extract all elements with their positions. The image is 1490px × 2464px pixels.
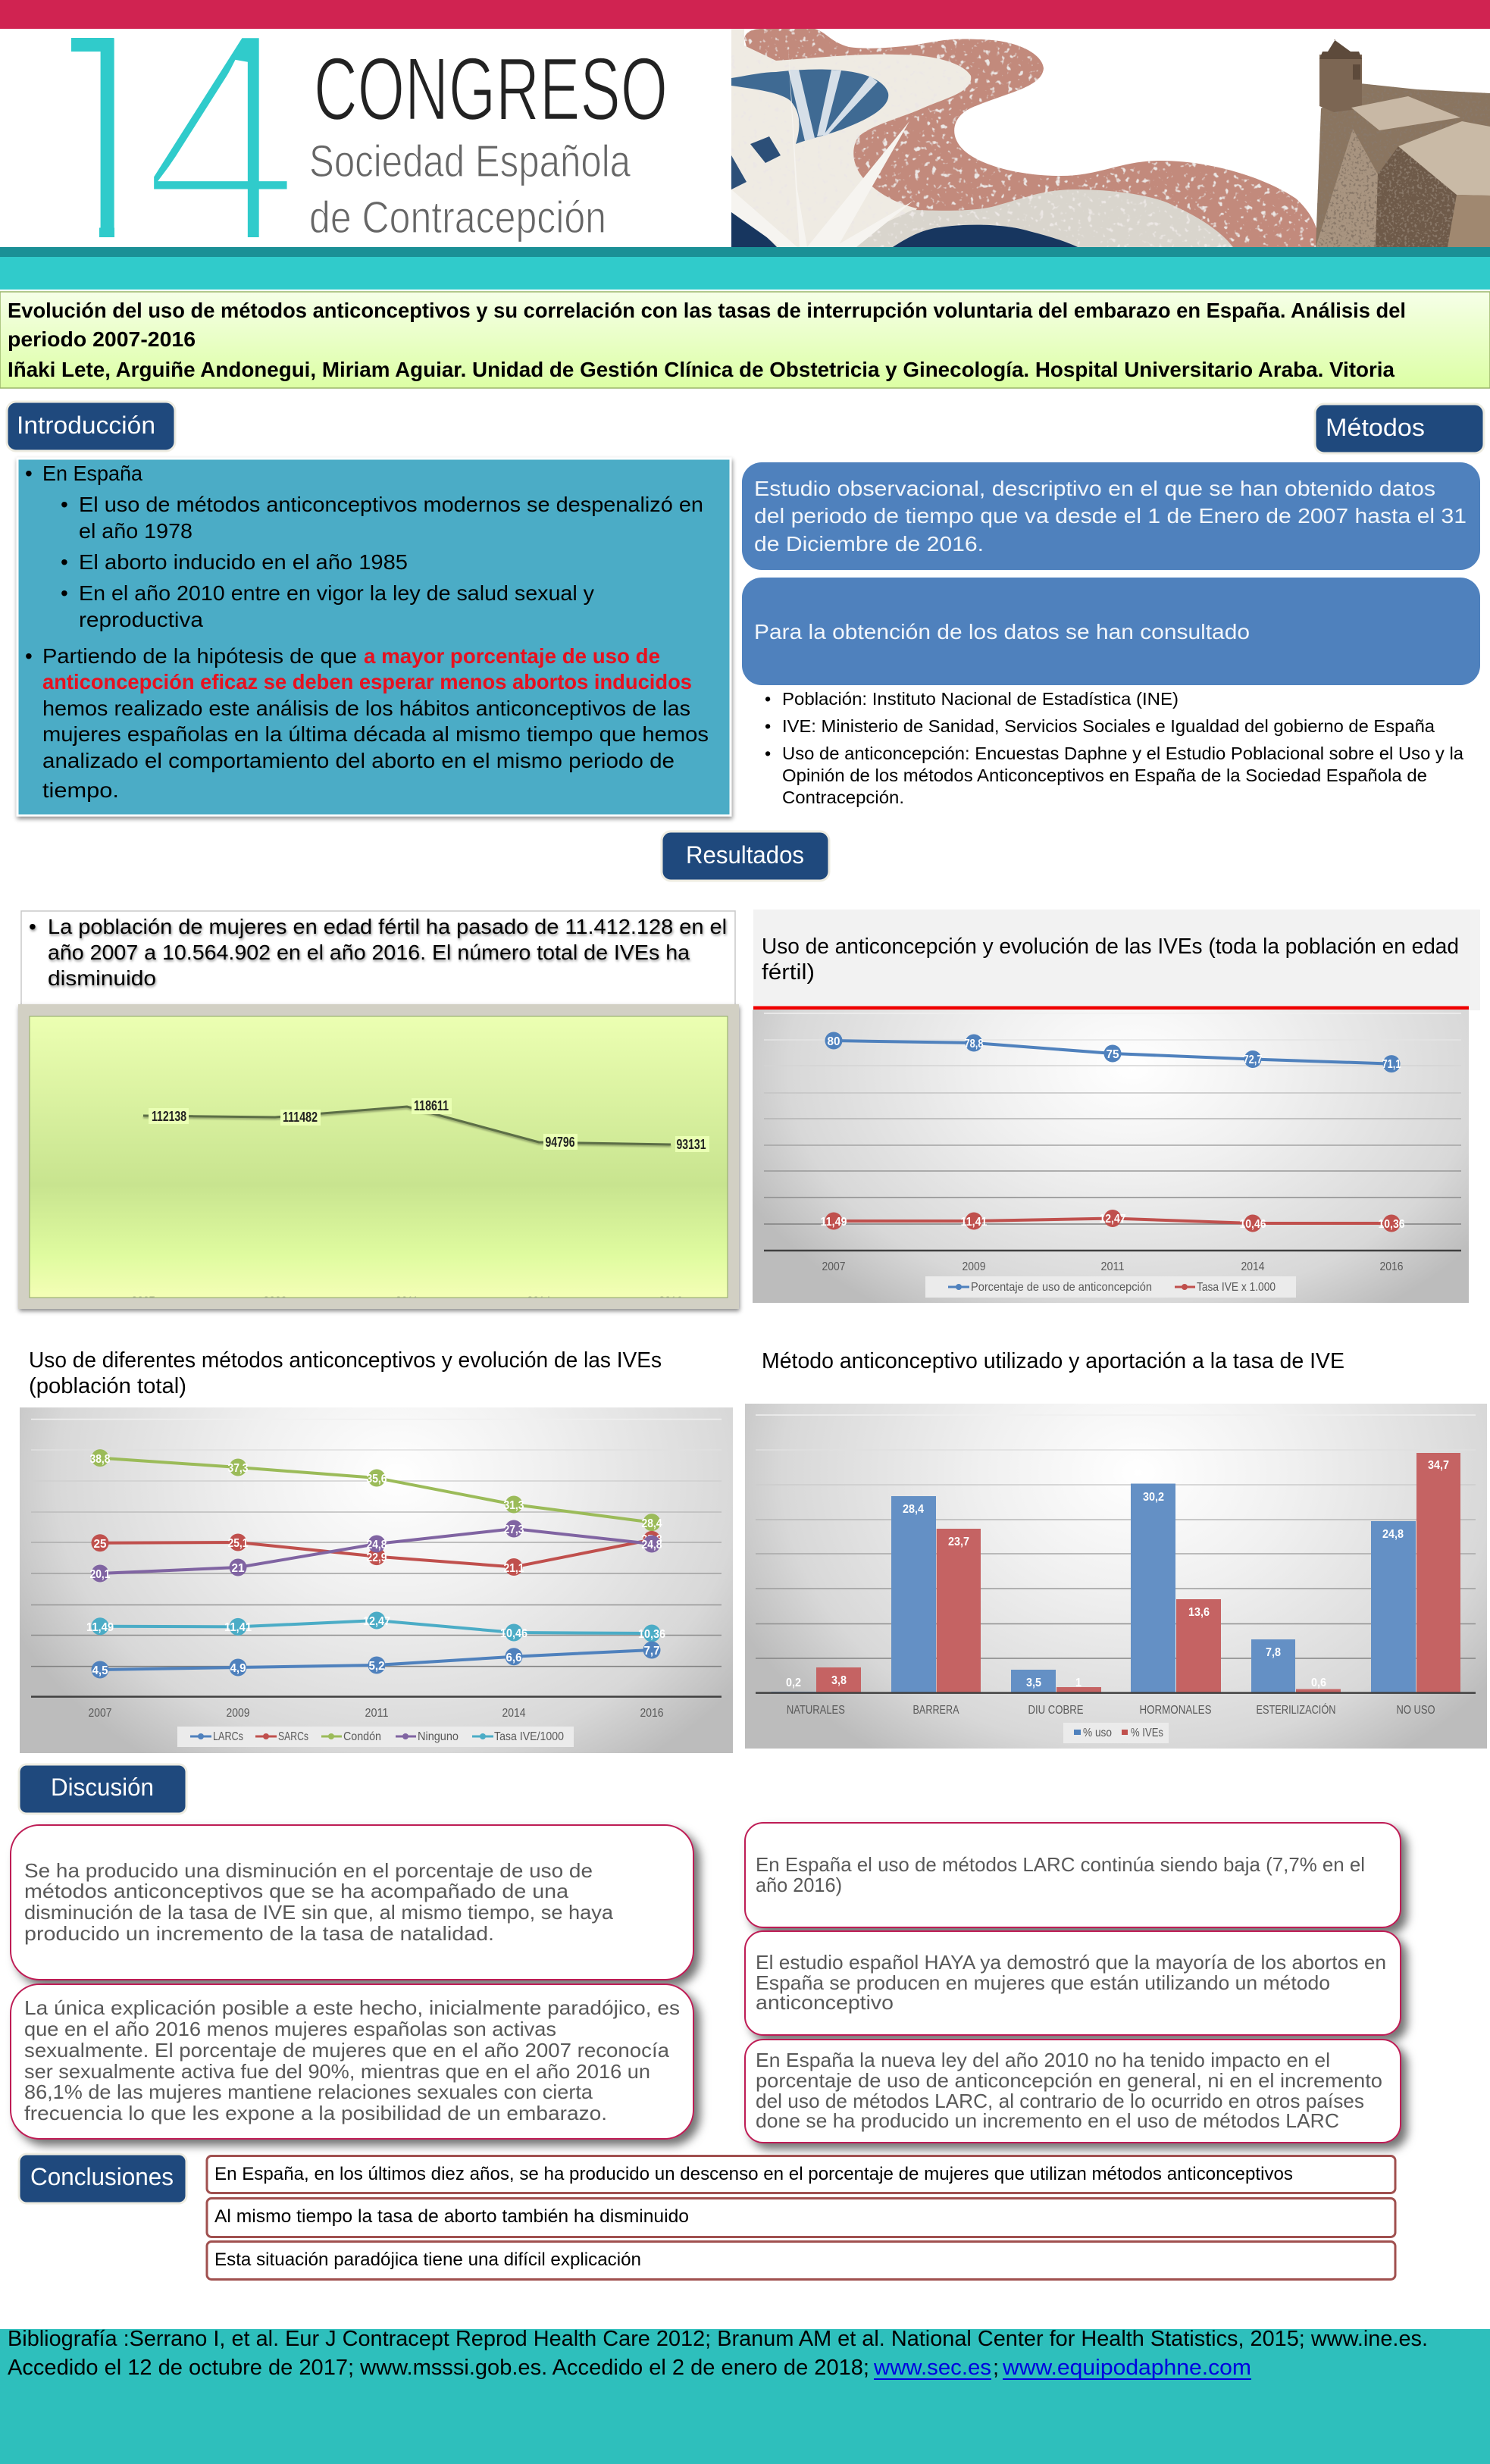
list: fuentes consultadas: Contracepción. xyxy=(782,787,904,807)
heading: Resultados xyxy=(662,831,829,881)
discussion box 3 xyxy=(745,1823,1401,1927)
chart: número total de IVEs: 111482 xyxy=(283,1110,318,1125)
series: SARCs: 25,8 xyxy=(641,1533,662,1546)
heading: Resultados: Resultados xyxy=(686,841,804,869)
series: porcentaje de uso: 75 xyxy=(1107,1048,1119,1061)
series: tasa IVE/1000: 10,46 xyxy=(500,1627,527,1640)
panel: población e IVEs: año 2007 a 10.564.902 en el año 2016. El número total de IVEs ha xyxy=(48,941,690,964)
axis years xyxy=(822,1260,1404,1273)
series: SARCs: 22,9 xyxy=(367,1551,387,1564)
category labels: BARRERA xyxy=(912,1704,959,1717)
chart heading: diferentes métodos: Uso de diferentes métodos anticonceptivos y evolución de las IVEs xyxy=(29,1348,662,1373)
category labels: NO USO xyxy=(1396,1704,1435,1717)
chart: número total de IVEs: 93131 xyxy=(676,1137,706,1152)
bar value labels xyxy=(786,1459,1449,1689)
panel: introducción: el año 1978 xyxy=(79,519,193,543)
list: fuentes consultadas xyxy=(765,689,1464,807)
series: porcentaje de uso: 78,8 xyxy=(964,1038,984,1050)
series: LARCs xyxy=(91,1642,661,1678)
heading: Introducción: Introducción xyxy=(17,412,155,439)
series: LARCs: 4,5 xyxy=(92,1664,108,1677)
chart heading: método utilizado: Método anticonceptivo utilizado y aportación a la tasa de IVE xyxy=(762,1349,1344,1373)
legend: LARCs xyxy=(213,1730,243,1743)
bar chart: método anticonceptivo y aportación xyxy=(745,1404,1487,1749)
panel: introducción: En el año 2010 entre en vigor la ley de salud sexual y xyxy=(79,581,594,605)
conclusion 1: En España, en los últimos diez años, se ha producido un descenso en el porcentaje de mujeres que utilizan métodos anticonceptivos xyxy=(214,2164,1293,2184)
panel: introducción: • xyxy=(61,550,68,574)
panel: estudio observacional: de Diciembre de 2016. xyxy=(754,532,984,556)
series: SARCs: 25,1 xyxy=(227,1537,249,1550)
series: ninguno: 24,8 xyxy=(641,1539,662,1551)
chart heading: diferentes métodos xyxy=(29,1348,662,1398)
chart: número total de IVEs: 2014 xyxy=(527,1294,551,1306)
discussion box 2: frecuencia lo que les expone a la posibilidad de un embarazo. xyxy=(24,2102,607,2124)
conclusion 3: Esta situación paradójica tiene una difícil explicación xyxy=(214,2250,641,2270)
discussion box 2: La única explicación posible a este hecho, inicialmente paradójico, es xyxy=(24,1996,680,2019)
list: fuentes consultadas: • xyxy=(765,689,771,709)
panel: introducción xyxy=(17,459,731,816)
footer: bibliografía: www.sec.es xyxy=(873,2356,991,2380)
title block xyxy=(0,292,1490,388)
conclusion 2 xyxy=(207,2198,1395,2237)
discussion box 4: El estudio español HAYA ya demostró que la mayoría de los abortos en xyxy=(756,1951,1386,1974)
logo: congress name xyxy=(309,39,668,243)
list: fuentes consultadas: Uso de anticoncepción: Encuestas Daphne y el Estudio Poblacional sobre el Uso y la xyxy=(782,744,1464,763)
list: fuentes consultadas: Opinión de los métodos Anticonceptivos en España de la Sociedad Española de xyxy=(782,765,1427,785)
panel: fuentes de datos: Para la obtención de los datos se han consultado xyxy=(754,620,1250,643)
legend: SARCs xyxy=(278,1730,308,1743)
list: fuentes consultadas: • xyxy=(765,744,771,763)
series: LARCs: 7,7 xyxy=(644,1645,660,1658)
legend xyxy=(177,1727,574,1747)
series: tasa IVE/1000: 10,36 xyxy=(638,1628,665,1641)
bar value labels: 1 xyxy=(1075,1677,1082,1689)
panel: introducción: analizado el comportamiento del aborto en el mismo periodo de xyxy=(42,749,675,772)
discussion box 2: que en el año 2016 menos mujeres españolas son activas xyxy=(24,2018,556,2040)
discussion box 1 xyxy=(11,1825,693,1980)
chart: número total de IVEs: 2007 xyxy=(131,1294,155,1306)
line chart: métodos anticonceptivos xyxy=(20,1407,733,1753)
bar value labels: 3,8 xyxy=(831,1674,847,1687)
bar value labels: 3,5 xyxy=(1026,1677,1041,1689)
series: LARCs: 6,6 xyxy=(506,1652,522,1664)
axis years: 2014 xyxy=(1241,1260,1265,1273)
discussion box 5: porcentaje de uso de anticoncepción en general, ni en el incremento xyxy=(756,2069,1382,2092)
panel: introducción: El aborto inducido en el año 1985 xyxy=(79,550,408,574)
series: SARCs: 21,1 xyxy=(503,1562,524,1575)
panel: introducción: tiempo. xyxy=(42,778,119,802)
discussion box 1: Se ha producido una disminución en el porcentaje de uso de xyxy=(24,1859,593,1882)
conclusion 1 xyxy=(207,2156,1395,2193)
chart: número total de IVEs: 2009 xyxy=(263,1294,287,1306)
chart: número total de IVEs: 2011 xyxy=(396,1294,418,1306)
category labels: DIU COBRE xyxy=(1028,1704,1084,1717)
legend xyxy=(1063,1723,1169,1743)
chart heading: uso de anticoncepción: Uso de anticoncepción y evolución de las IVEs (toda la población en edad xyxy=(762,935,1459,959)
logo: congress number 14 xyxy=(11,0,313,310)
footer: bibliografía: Bibliografía :Serrano I, et al. Eur J Contracept Reprod Health Care 2012; Branum AM et al. National Center for Health Statistics, 2015; www.ine.es. xyxy=(8,2327,1428,2351)
series: tasa IVE: 10,46 xyxy=(1240,1218,1266,1231)
series: porcentaje de uso: 72,7 xyxy=(1243,1054,1263,1066)
chart: número total de IVEs xyxy=(18,1004,739,1309)
bars: % uso xyxy=(772,1484,1416,1693)
panel: población e IVEs: La población de mujeres en edad fértil ha pasado de 11.412.128 en el xyxy=(48,915,727,938)
series: condón: 31,3 xyxy=(503,1499,524,1512)
series: ninguno: 21 xyxy=(232,1562,245,1575)
bar value labels: 30,2 xyxy=(1143,1491,1164,1504)
discussion box 4 xyxy=(745,1931,1401,2035)
panel: estudio observacional: del periodo de tiempo que va desde el 1 de Enero de 2007 hasta el 31 xyxy=(754,504,1467,528)
axis years: 2011 xyxy=(1100,1260,1125,1273)
footer: bibliografía: ; xyxy=(993,2356,999,2380)
red divider under heading xyxy=(753,1007,1469,1010)
category labels: NATURALES xyxy=(787,1704,845,1717)
bars: % IVEs xyxy=(816,1453,1460,1693)
series: porcentaje de uso: 71,1 xyxy=(1382,1058,1401,1071)
heading: Conclusiones: Conclusiones xyxy=(30,2163,174,2190)
title text: Evolución del uso de métodos anticonceptivos y su correlación con las tasas de interrupción voluntaria del embarazo en España. Análisis del xyxy=(8,299,1406,322)
legend: Ninguno xyxy=(418,1730,459,1743)
heading: Métodos: Métodos xyxy=(1326,414,1425,441)
series: tasa IVE xyxy=(820,1210,1405,1232)
legend: Porcentaje de uso de anticoncepción xyxy=(971,1281,1152,1294)
axis years: 2016 xyxy=(640,1707,664,1720)
panel: introducción: • xyxy=(61,581,68,605)
discussion box 2: 86,1% de las mujeres mantiene relaciones sexuales con cierta xyxy=(24,2080,593,2103)
legend: % IVEs xyxy=(1131,1727,1163,1739)
axis years: 2011 xyxy=(365,1707,389,1720)
title text: Iñaki Lete, Arguiñe Andonegui, Miriam Aguiar. Unidad de Gestión Clínica de Obstetricia y Ginecología. Hospital Universitario Araba. Vitoria xyxy=(8,358,1395,381)
series: LARCs: 5,2 xyxy=(368,1660,385,1673)
conclusion 3 xyxy=(207,2242,1395,2280)
chart heading: uso de anticoncepción xyxy=(753,910,1480,1010)
series: porcentaje de uso xyxy=(825,1032,1401,1072)
footer: bibliografía: Accedido el 12 de octubre de 2017; www.msssi.gob.es. Accedido el 2 de enero de 2018; xyxy=(8,2356,869,2380)
series: tasa IVE: 11,41 xyxy=(961,1216,988,1229)
legend: Condón xyxy=(343,1730,381,1743)
axis years: 2014 xyxy=(502,1707,526,1720)
panel: introducción: • xyxy=(25,644,33,668)
heading: Introducción xyxy=(7,402,175,451)
panel: introducción: hemos realizado este análisis de los hábitos anticonceptivos de las xyxy=(42,697,690,720)
bar value labels: 24,8 xyxy=(1382,1528,1404,1541)
series: tasa IVE/1000: 11,49 xyxy=(86,1621,114,1634)
title text xyxy=(8,299,1406,381)
discussion box 4: anticonceptivo xyxy=(756,1991,894,2014)
logo: congress name: de Contracepción xyxy=(309,193,606,243)
panel: introducción: El uso de métodos anticonceptivos modernos se despenalizó en xyxy=(79,493,703,516)
chart: número total de IVEs: 2016 xyxy=(659,1294,683,1306)
panel: población e IVEs: • xyxy=(29,915,36,938)
list: fuentes consultadas: • xyxy=(765,716,771,736)
line chart: uso de anticoncepción y tasa IVE xyxy=(753,1007,1469,1303)
panel: introducción: • xyxy=(61,493,68,516)
legend: Tasa IVE/1000 xyxy=(494,1730,564,1743)
series: porcentaje de uso: 80 xyxy=(828,1035,840,1048)
panel: introducción: En España xyxy=(42,462,142,485)
panel: estudio observacional: Estudio observacional, descriptivo en el que se han obtenido datos xyxy=(754,477,1435,500)
legend: % uso xyxy=(1083,1727,1112,1739)
category labels xyxy=(787,1702,1435,1717)
conclusion 2: Al mismo tiempo la tasa de aborto también ha disminuido xyxy=(214,2206,689,2227)
series: tasa IVE/1000: 12,47 xyxy=(363,1615,390,1628)
panel: población e IVEs xyxy=(21,911,735,1006)
discussion box 1: métodos anticonceptivos que se ha acompañado de una xyxy=(24,1880,569,1902)
panel: estudio observacional xyxy=(742,462,1480,570)
category labels: ESTERILIZACIÓN xyxy=(1257,1702,1335,1717)
discussion box 5: done se ha producido un incremento en el uso de métodos LARC xyxy=(756,2109,1339,2132)
title text: periodo 2007-2016 xyxy=(8,327,196,351)
logo: congress name: CONGRESO xyxy=(314,39,668,139)
panel: fuentes de datos xyxy=(742,578,1480,685)
chart: número total de IVEs: 94796 xyxy=(546,1135,574,1150)
series: ninguno: 20,1 xyxy=(89,1568,111,1581)
bar value labels: 28,4 xyxy=(903,1503,924,1516)
footer: bibliografía xyxy=(0,2327,1490,2464)
header illustration: abstract shapes xyxy=(731,29,1490,247)
heading: Discusión: Discusión xyxy=(51,1774,154,1801)
panel: introducción: mujeres españolas en la última década al mismo tiempo que hemos xyxy=(42,722,709,746)
discussion box 3: año 2016) xyxy=(756,1874,842,1896)
discussion box 2 xyxy=(11,1984,693,2139)
discussion box 2: ser sexualmente activa fue del 90%, mientras que en el año 2016 un xyxy=(24,2060,650,2083)
series: condón xyxy=(89,1449,662,1531)
header white banner xyxy=(0,29,1490,247)
heading: Métodos xyxy=(1315,404,1484,453)
axis years: 2016 xyxy=(1379,1260,1404,1273)
chart: número total de IVEs: 112138 xyxy=(152,1109,186,1124)
series: tasa IVE/1000 xyxy=(86,1611,665,1642)
axis years: 2009 xyxy=(226,1707,250,1720)
legend xyxy=(925,1276,1296,1298)
axis years xyxy=(88,1707,664,1720)
series: condón: 28,4 xyxy=(641,1517,662,1530)
panel: introducción: a mayor porcentaje de uso de xyxy=(364,644,660,668)
panel: introducción: anticoncepción eficaz se deben esperar menos abortos inducidos xyxy=(42,670,692,693)
header red band xyxy=(0,0,1490,29)
discussion box 2: sexualmente. El porcentaje de mujeres que en el año 2007 reconocía xyxy=(24,2039,670,2062)
series: condón: 35,6 xyxy=(367,1473,387,1486)
discussion box 5: En España la nueva ley del año 2010 no ha tenido impacto en el xyxy=(756,2049,1330,2071)
series: tasa IVE/1000: 11,41 xyxy=(224,1621,252,1634)
series: SARCs xyxy=(91,1531,662,1576)
chart: número total de IVEs: 118611 xyxy=(414,1098,449,1113)
legend: Tasa IVE x 1.000 xyxy=(1197,1281,1276,1294)
logo: congress name: Sociedad Española xyxy=(309,136,631,186)
panel: introducción: • xyxy=(25,462,33,485)
series: ninguno xyxy=(89,1520,662,1583)
category labels: HORMONALES xyxy=(1140,1704,1211,1717)
series: tasa IVE: 12,47 xyxy=(1099,1213,1126,1226)
axis years: 2009 xyxy=(963,1260,986,1273)
series: ninguno: 24,8 xyxy=(367,1539,387,1551)
series: SARCs: 25 xyxy=(94,1538,107,1551)
bar value labels: 7,8 xyxy=(1266,1646,1281,1659)
footer: bibliografía: www.equipodaphne.com xyxy=(1002,2356,1251,2380)
bar value labels: 0,6 xyxy=(1311,1677,1326,1689)
discussion box 4: España se producen en mujeres que están utilizando un método xyxy=(756,1971,1330,1994)
panel: introducción: Partiendo de la hipótesis de que xyxy=(42,644,357,668)
bar value labels: 0,2 xyxy=(786,1677,801,1689)
series: condón: 38,8 xyxy=(89,1453,111,1466)
chart heading: uso de anticoncepción: fértil) xyxy=(762,960,815,985)
discussion box 1: disminución de la tasa de IVE sin que, al mismo tiempo, se haya xyxy=(24,1901,614,1924)
discussion box 5: del uso de métodos LARC, al contrario de lo ocurrido en otros países xyxy=(756,2090,1364,2112)
axis years: 2007 xyxy=(88,1707,112,1720)
list: fuentes consultadas: IVE: Ministerio de Sanidad, Servicios Sociales e Igualdad del gobierno de España xyxy=(782,716,1435,736)
panel: introducción: reproductiva xyxy=(79,608,203,631)
series: tasa IVE: 10,36 xyxy=(1378,1218,1405,1231)
heading: Conclusiones xyxy=(19,2154,186,2203)
axis years: 2007 xyxy=(822,1260,846,1273)
panel: población e IVEs: disminuido xyxy=(48,966,156,990)
series: LARCs: 4,9 xyxy=(230,1662,246,1675)
discussion box 1: producido un incremento de la tasa de natalidad. xyxy=(24,1922,494,1945)
discussion box 5 xyxy=(745,2040,1401,2143)
list: fuentes consultadas: Población: Instituto Nacional de Estadística (INE) xyxy=(782,689,1179,709)
heading: Discusión xyxy=(19,1764,186,1814)
bar value labels: 23,7 xyxy=(948,1536,969,1548)
series: condón: 37,3 xyxy=(227,1462,249,1475)
header teal bands xyxy=(0,247,1490,290)
discussion box 3: En España el uso de métodos LARC continúa siendo baja (7,7% en el xyxy=(756,1853,1365,1876)
bar value labels: 34,7 xyxy=(1428,1459,1449,1472)
chart heading: diferentes métodos: (población total) xyxy=(29,1374,186,1398)
bar value labels: 13,6 xyxy=(1188,1606,1210,1619)
series: ninguno: 27,3 xyxy=(503,1523,524,1536)
series: tasa IVE: 11,49 xyxy=(820,1216,847,1229)
